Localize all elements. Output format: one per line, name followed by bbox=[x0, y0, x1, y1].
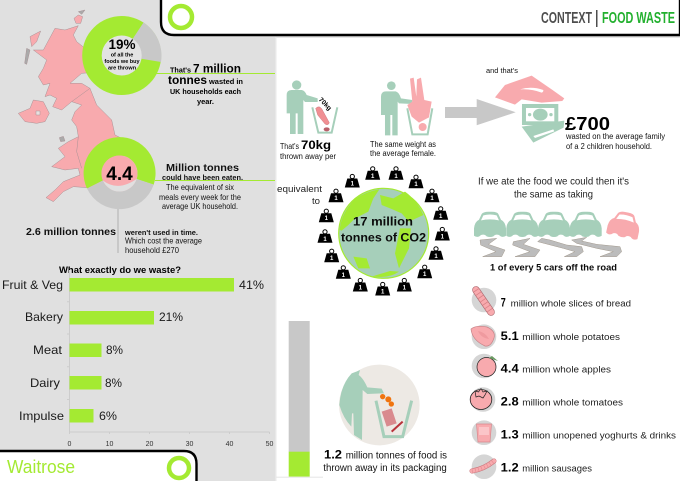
text: 7 million tonnes bbox=[168, 64, 243, 106]
text: equivalent to: equivalent bbox=[277, 184, 323, 194]
weights ring: 1 bbox=[434, 254, 438, 260]
weights ring: 1 bbox=[342, 273, 346, 279]
list: sausages: million sausages bbox=[522, 463, 593, 473]
text: 7 million tonnes: wasted in bbox=[208, 77, 243, 86]
icon: cars bbox=[474, 209, 642, 240]
icon: roads bbox=[480, 237, 622, 257]
bar chart: what exactly do we waste: Dairy bbox=[30, 376, 60, 390]
arrow bbox=[445, 99, 516, 125]
weights ring: 1 bbox=[381, 290, 385, 296]
bar chart: what exactly do we waste: 8% bbox=[106, 343, 123, 357]
bar chart: what exactly do we waste: Meat bbox=[33, 343, 63, 357]
map: UK bbox=[18, 10, 123, 202]
text: 700 pounds: of a 2 children household. bbox=[566, 142, 652, 151]
weights ring: 1 bbox=[430, 196, 434, 202]
icon: hand over money bbox=[495, 76, 564, 143]
weights ring: 1 bbox=[394, 174, 398, 180]
weights ring: 1 bbox=[334, 196, 338, 202]
bar chart: what exactly do we waste: 20 bbox=[146, 441, 153, 448]
text: and that's: and that's bbox=[486, 66, 518, 75]
weights ring: 1 bbox=[351, 182, 355, 188]
leader lines bbox=[117, 73, 276, 253]
donut: 19 percent bbox=[82, 16, 162, 95]
list: apples: million whole apples bbox=[522, 365, 612, 375]
donut label bbox=[104, 37, 141, 72]
text: 1 of every 5 cars: 1 of every 5 cars off the road bbox=[490, 263, 617, 274]
title: CONTEXT bbox=[541, 10, 592, 27]
logo: Waitrose: Waitrose bbox=[7, 457, 75, 477]
donut value: 4.4 bbox=[106, 164, 133, 185]
text: thrown away in packaging bbox=[323, 448, 447, 474]
list: potatoes: million whole potatoes bbox=[522, 332, 621, 342]
list: sausages: 1.2 bbox=[501, 460, 519, 474]
bar chart: what exactly do we waste: 41% bbox=[239, 278, 264, 292]
text: 7 million tonnes: 7 million bbox=[193, 64, 241, 76]
text: 2.6 million tonnes: Which cost the average bbox=[125, 236, 202, 246]
chart heading: What exactly do we waste? bbox=[59, 265, 181, 275]
text: could have been eaten: meals every week for the bbox=[159, 193, 241, 202]
bar chart: what exactly do we waste: 10 bbox=[106, 441, 113, 448]
list: apples bbox=[472, 354, 612, 378]
text: 2.6 million tonnes: household £270 bbox=[125, 246, 180, 255]
donut label: 19% bbox=[108, 37, 136, 52]
text: same weight as female: The same weight as bbox=[370, 140, 436, 149]
text: 7 million tonnes: UK households each bbox=[170, 87, 241, 96]
list: yoghurts and drinks bbox=[472, 420, 677, 445]
text: could have been eaten: average UK household. bbox=[162, 202, 238, 211]
icon: person binning packaged food bbox=[339, 365, 420, 445]
text: 70kg per person: thrown away per bbox=[280, 152, 336, 161]
bar chart: what exactly do we waste: 30 bbox=[186, 441, 193, 448]
text: 2.6 million tonnes bbox=[26, 227, 202, 255]
text: 7 million tonnes: That's bbox=[170, 66, 191, 74]
list: bread bbox=[472, 288, 631, 312]
text: equivalent to: to bbox=[312, 196, 320, 206]
weights ring: 1 bbox=[330, 256, 334, 262]
text: 700 pounds: wasted on the average family bbox=[565, 132, 665, 141]
text: 7 million tonnes: year. bbox=[197, 97, 214, 106]
list: yoghurts and drinks: million unopened yoghurts & drinks bbox=[522, 431, 677, 441]
weights ring: 1 bbox=[423, 272, 427, 278]
bar chart: what exactly do we waste: 40 bbox=[226, 441, 233, 448]
icon: footer ring bbox=[169, 458, 189, 478]
text: could have been eaten: Million tonnes bbox=[166, 162, 239, 174]
text: same as taking: the same as taking bbox=[514, 189, 593, 200]
weights ring: 1 bbox=[414, 182, 418, 188]
list: potatoes: 5.1 bbox=[501, 329, 519, 343]
text: same weight as female bbox=[370, 140, 436, 158]
globe label bbox=[341, 215, 426, 245]
text: same weight as female: the average female. bbox=[370, 149, 436, 158]
bar chart: what exactly do we waste: 50 bbox=[266, 441, 273, 448]
bar: share thrown away in packaging bbox=[276, 321, 323, 478]
bar chart: what exactly do we waste: 21% bbox=[159, 310, 183, 324]
text: 70kg per person bbox=[280, 138, 336, 161]
bar chart: what exactly do we waste: Impulse bbox=[19, 409, 64, 423]
panel: footer bbox=[0, 451, 196, 481]
donut: 4.4 million tonnes bbox=[84, 137, 156, 209]
text: 2.6 million tonnes: 2.6 million tonnes bbox=[26, 227, 116, 238]
text: thrown away in packaging: 1.2 bbox=[324, 448, 342, 462]
text: 700 pounds: £700 bbox=[565, 114, 610, 134]
bar chart: what exactly do we waste: 6% bbox=[99, 409, 117, 423]
weights ring: 1 bbox=[359, 286, 363, 292]
bar chart: what exactly do we waste: Bakery bbox=[25, 310, 63, 324]
icon: person binning 70kg: 70kg bbox=[317, 96, 333, 112]
weights ring: 1 bbox=[403, 286, 407, 292]
bar chart: what exactly do we waste: Fruit & Veg bbox=[2, 278, 63, 292]
list: potatoes bbox=[471, 324, 621, 349]
text: 700 pounds bbox=[565, 114, 665, 151]
text: 7 million tonnes: tonnes bbox=[168, 75, 207, 87]
bar chart: what exactly do we waste: 0 bbox=[68, 441, 72, 448]
title bbox=[541, 10, 675, 27]
list: tomatoes: million whole tomatoes bbox=[522, 398, 624, 408]
list: apples: 4.4 bbox=[501, 362, 519, 376]
globe label: tonnes of CO2 bbox=[341, 231, 426, 245]
weights ring: 1 bbox=[371, 174, 375, 180]
bar chart: what exactly do we waste bbox=[2, 265, 273, 448]
globe label: 17 million bbox=[353, 215, 413, 229]
icon: header ring bbox=[170, 6, 192, 28]
text: thrown away in packaging: thrown away in its packaging bbox=[323, 463, 447, 474]
text: same as taking: If we ate the food we could then it's bbox=[478, 176, 629, 187]
weights ring: 1 bbox=[439, 214, 443, 220]
icon: person binning female figure bbox=[381, 78, 432, 135]
text: 70kg per person: That's bbox=[280, 142, 299, 151]
list: yoghurts and drinks: 1.3 bbox=[501, 428, 519, 442]
text: could have been eaten: could have been eaten. bbox=[162, 173, 243, 182]
text: same as taking bbox=[478, 176, 629, 200]
panel: top header bbox=[161, 0, 680, 38]
list: bread: 7 bbox=[501, 296, 506, 310]
text: 2.6 million tonnes: weren't used in time. bbox=[124, 230, 198, 237]
donut label: foods we buy bbox=[104, 59, 141, 65]
weights ring: 1 bbox=[323, 237, 327, 243]
weights ring: 1 bbox=[441, 234, 445, 240]
weights ring: 1 bbox=[325, 216, 329, 222]
weights ring bbox=[318, 167, 450, 296]
icon: person binning 70kg bbox=[287, 80, 337, 134]
donut label: of all the bbox=[111, 52, 133, 58]
text: thrown away in packaging: million tonnes of food is bbox=[346, 451, 447, 462]
text: 70kg per person: 70kg bbox=[301, 138, 331, 152]
bar chart: what exactly do we waste: 8% bbox=[105, 376, 122, 390]
globe: 17 million tonnes of CO2 bbox=[339, 188, 429, 278]
list: tomatoes bbox=[470, 387, 624, 412]
text: could have been eaten: The equivalent of six bbox=[166, 183, 234, 192]
list: sausages bbox=[472, 454, 593, 479]
list: tomatoes: 2.8 bbox=[501, 395, 519, 409]
list: bread: million whole slices of bread bbox=[511, 299, 631, 309]
donut label: are thrown bbox=[108, 66, 137, 72]
text: equivalent to bbox=[277, 184, 323, 206]
text: could have been eaten bbox=[159, 162, 243, 211]
